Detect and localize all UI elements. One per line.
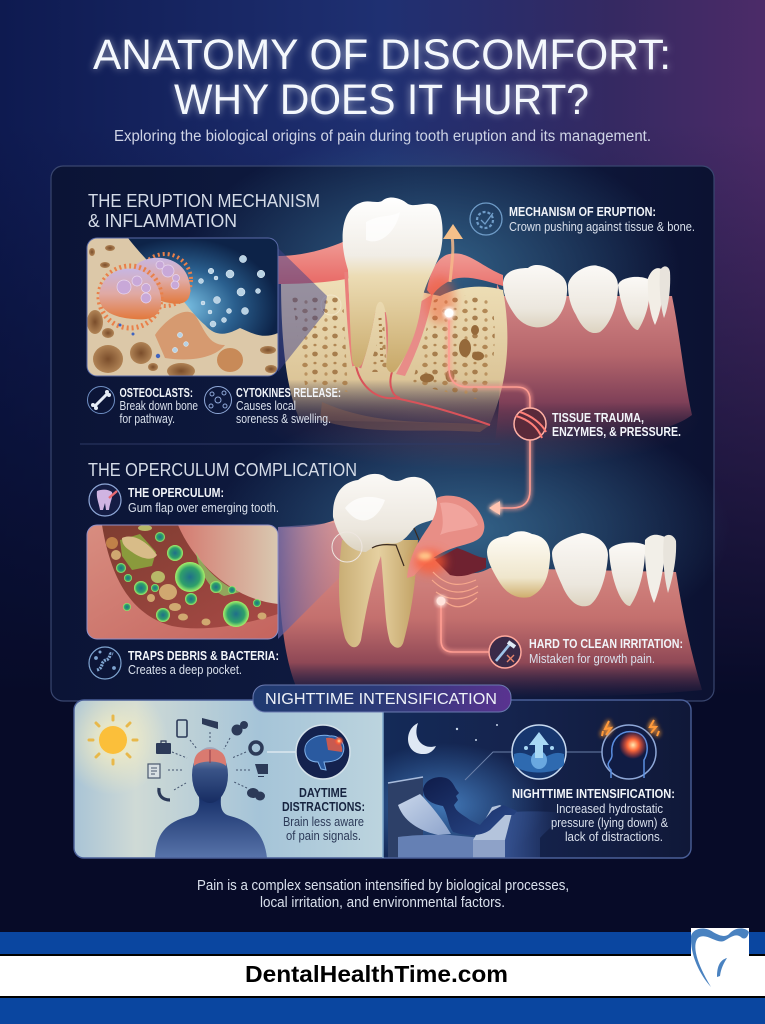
dot: inflammation point [444, 308, 454, 318]
section heading: operculum: THE OPERCULUM COMPLICATION [88, 459, 357, 480]
main tooth [343, 197, 443, 373]
dot: irritation point [436, 596, 446, 606]
distraction icons [148, 718, 268, 800]
footer band [0, 932, 765, 1024]
label: osteoclasts: Break down bone [120, 399, 198, 413]
icon: sun [89, 716, 137, 764]
label: nighttime: Increased hydrostatic [556, 802, 663, 816]
label: mechanism of eruption [509, 205, 695, 234]
label: hard to clean: Mistaken for growth pain. [529, 652, 655, 666]
callout line: tissue trauma [449, 313, 530, 508]
inset 2 border [87, 525, 278, 639]
icon: tissue trauma [514, 408, 546, 440]
label: daytime: Brain less aware [283, 815, 364, 829]
magnifier ring tooth 1 [321, 295, 341, 315]
connector [267, 751, 297, 753]
label: the operculum [128, 486, 279, 515]
pill heading: nighttime intensification [253, 685, 511, 712]
logo: tooth [691, 928, 749, 987]
irritation arcs [432, 572, 478, 607]
label: nighttime: lack of distractions. [565, 830, 663, 844]
icon: brain [296, 725, 350, 779]
figure: person [155, 747, 267, 858]
nerve lines [356, 366, 490, 425]
title [93, 31, 671, 124]
inset: bacteria [87, 525, 278, 639]
subtitle: Exploring the biological origins of pain during tooth eruption and its management. [114, 128, 651, 145]
section heading: eruption: THE ERUPTION MECHANISM [88, 190, 320, 211]
label: nighttime [512, 787, 675, 844]
tooth 2 crown [333, 474, 438, 552]
lower teeth [487, 531, 550, 598]
closing statement: local irritation, and environmental factors. [260, 895, 505, 911]
label: osteoclasts: for pathway. [120, 412, 175, 426]
label: daytime: of pain signals. [286, 829, 361, 843]
label: hard to clean: HARD TO CLEAN IRRITATION: [529, 637, 683, 651]
panel: nighttime [384, 700, 690, 858]
label: daytime: DAYTIME [299, 786, 347, 800]
icon: osteoclasts bone [88, 386, 114, 414]
right teeth [503, 265, 567, 327]
pill heading: nighttime intensification: NIGHTTIME INTENSIFICATION [265, 691, 497, 708]
gum band [278, 241, 350, 284]
label: tissue trauma [552, 411, 681, 439]
arrow head: tooth 2 pointer [489, 501, 500, 515]
icon: hard to clean [489, 636, 521, 668]
label: hard to clean [529, 637, 683, 666]
connector wedge: inset 1 [278, 248, 327, 372]
label: mechanism of eruption: Crown pushing against tissue & bone. [509, 220, 695, 234]
bottom panel border [74, 700, 691, 858]
gum base [278, 520, 702, 698]
illustration: operculum tooth and jaw [278, 474, 702, 698]
label: cytokines: CYTOKINES RELEASE: [236, 386, 341, 400]
figure: bed and sleeper [388, 777, 562, 858]
tooth 2 roots [339, 540, 418, 648]
operculum flap [407, 496, 484, 578]
label: traps debris: TRAPS DEBRIS & BACTERIA: [128, 649, 279, 663]
panel: daytime [74, 700, 382, 858]
label: tissue trauma: ENZYMES, & PRESSURE. [552, 425, 681, 439]
label: traps debris: Creates a deep pocket. [128, 663, 242, 677]
inset: osteoclasts [87, 238, 278, 379]
label: osteoclasts [120, 386, 198, 426]
closing statement: Pain is a complex sensation intensified by biological processes, [197, 878, 569, 894]
label: the operculum: THE OPERCULUM: [128, 486, 224, 500]
icon: cytokines [204, 386, 232, 414]
icon: head with pain [602, 720, 659, 779]
title: ANATOMY OF DISCOMFORT: [93, 31, 671, 79]
label: the operculum: Gum flap over emerging tooth. [128, 501, 279, 515]
footer website: DentalHealthTime.com [245, 961, 508, 987]
label: daytime: DISTRACTIONS: [282, 800, 365, 814]
label: tissue trauma: TISSUE TRAUMA, [552, 411, 644, 425]
arrow: eruption up [443, 224, 463, 282]
label: mechanism of eruption: MECHANISM OF ERUPTION: [509, 205, 656, 219]
label: traps debris [128, 649, 279, 677]
dark pocket [435, 548, 486, 576]
label: cytokines [236, 386, 341, 426]
icon: mechanism of eruption [470, 203, 502, 235]
title: WHY DOES IT HURT? [174, 76, 589, 124]
label: daytime [282, 786, 365, 843]
callout line: hard to clean [441, 601, 490, 652]
inset 1 border [87, 238, 278, 376]
section heading: eruption [88, 190, 320, 231]
jaw gum right [495, 284, 692, 442]
label: osteoclasts: OSTEOCLASTS: [120, 386, 193, 400]
label: cytokines: Causes local [236, 399, 296, 413]
label: nighttime: NIGHTTIME INTENSIFICATION: [512, 787, 675, 801]
connectors [465, 752, 602, 780]
icon: hydrostatic pressure [512, 725, 566, 779]
icon: operculum [89, 484, 121, 516]
main panel [51, 130, 730, 701]
closing statement [197, 878, 569, 911]
section heading: eruption: & INFLAMMATION [88, 210, 237, 231]
label: nighttime: pressure (lying down) & [551, 816, 669, 830]
magnifier ring tooth 2 [332, 532, 362, 562]
bone cross section [281, 276, 507, 432]
icon: moon [408, 723, 436, 754]
illustration: erupting tooth and jaw [278, 197, 692, 442]
icon: bacteria [89, 647, 121, 679]
label: cytokines: soreness & swelling. [236, 412, 331, 426]
